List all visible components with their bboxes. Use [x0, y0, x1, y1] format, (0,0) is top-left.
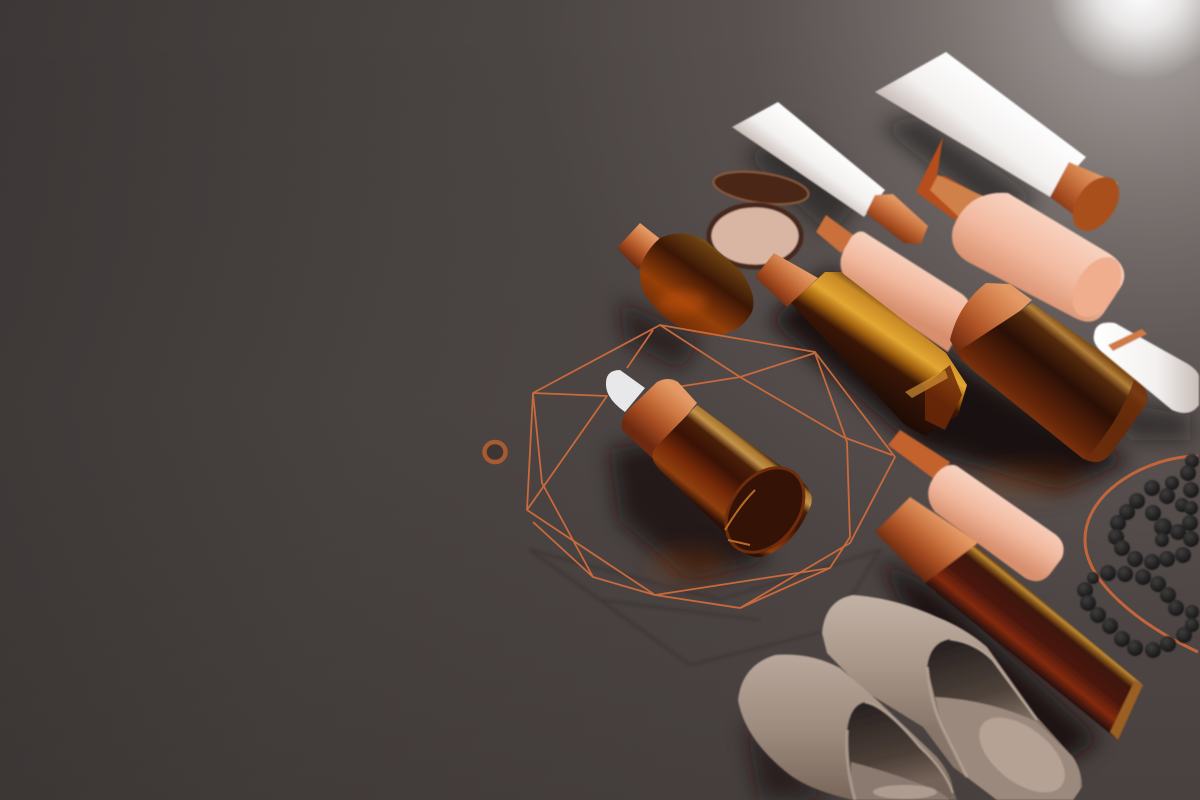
small copper ring [484, 442, 506, 462]
pump head [916, 137, 983, 222]
copper bracelet [1085, 456, 1198, 652]
large white tube [875, 52, 1129, 239]
dropper bottle [606, 370, 820, 567]
large amber bottle [950, 283, 1148, 462]
lower peach bottle [888, 430, 1064, 581]
copper collar [622, 379, 697, 458]
right slipper opening [927, 639, 1081, 800]
soft shadows under objects [610, 115, 1190, 800]
right slipper heel pad [966, 703, 1078, 800]
slippers [738, 595, 1082, 800]
small white tube [732, 102, 928, 244]
long bottle cap [875, 497, 978, 592]
left slipper heel pad [873, 785, 937, 799]
black bead bracelet [1077, 454, 1199, 658]
amber reflections on the surface [650, 462, 1085, 583]
copper wire geometric tray [527, 325, 895, 608]
right slipper [822, 595, 1082, 800]
bottle base [710, 453, 820, 567]
pump body [952, 193, 1124, 322]
small tube cap [866, 194, 928, 244]
compact case [709, 166, 811, 267]
large tube cap [1050, 162, 1129, 239]
left slipper [738, 655, 957, 800]
small white bottle [1094, 322, 1199, 413]
left slipper opening [847, 702, 953, 800]
compact base [709, 205, 801, 267]
gold glass bottle [755, 253, 967, 436]
wire frame shadow [530, 550, 880, 665]
long bottle glass [925, 545, 1143, 740]
white dropper tip [606, 370, 645, 412]
pump bottle [916, 137, 1131, 326]
upper peach bottle [816, 215, 970, 352]
round amber bottle [617, 223, 754, 335]
compact lid [711, 166, 811, 210]
long amber bottle [875, 497, 1143, 740]
amber glass body [652, 405, 812, 557]
